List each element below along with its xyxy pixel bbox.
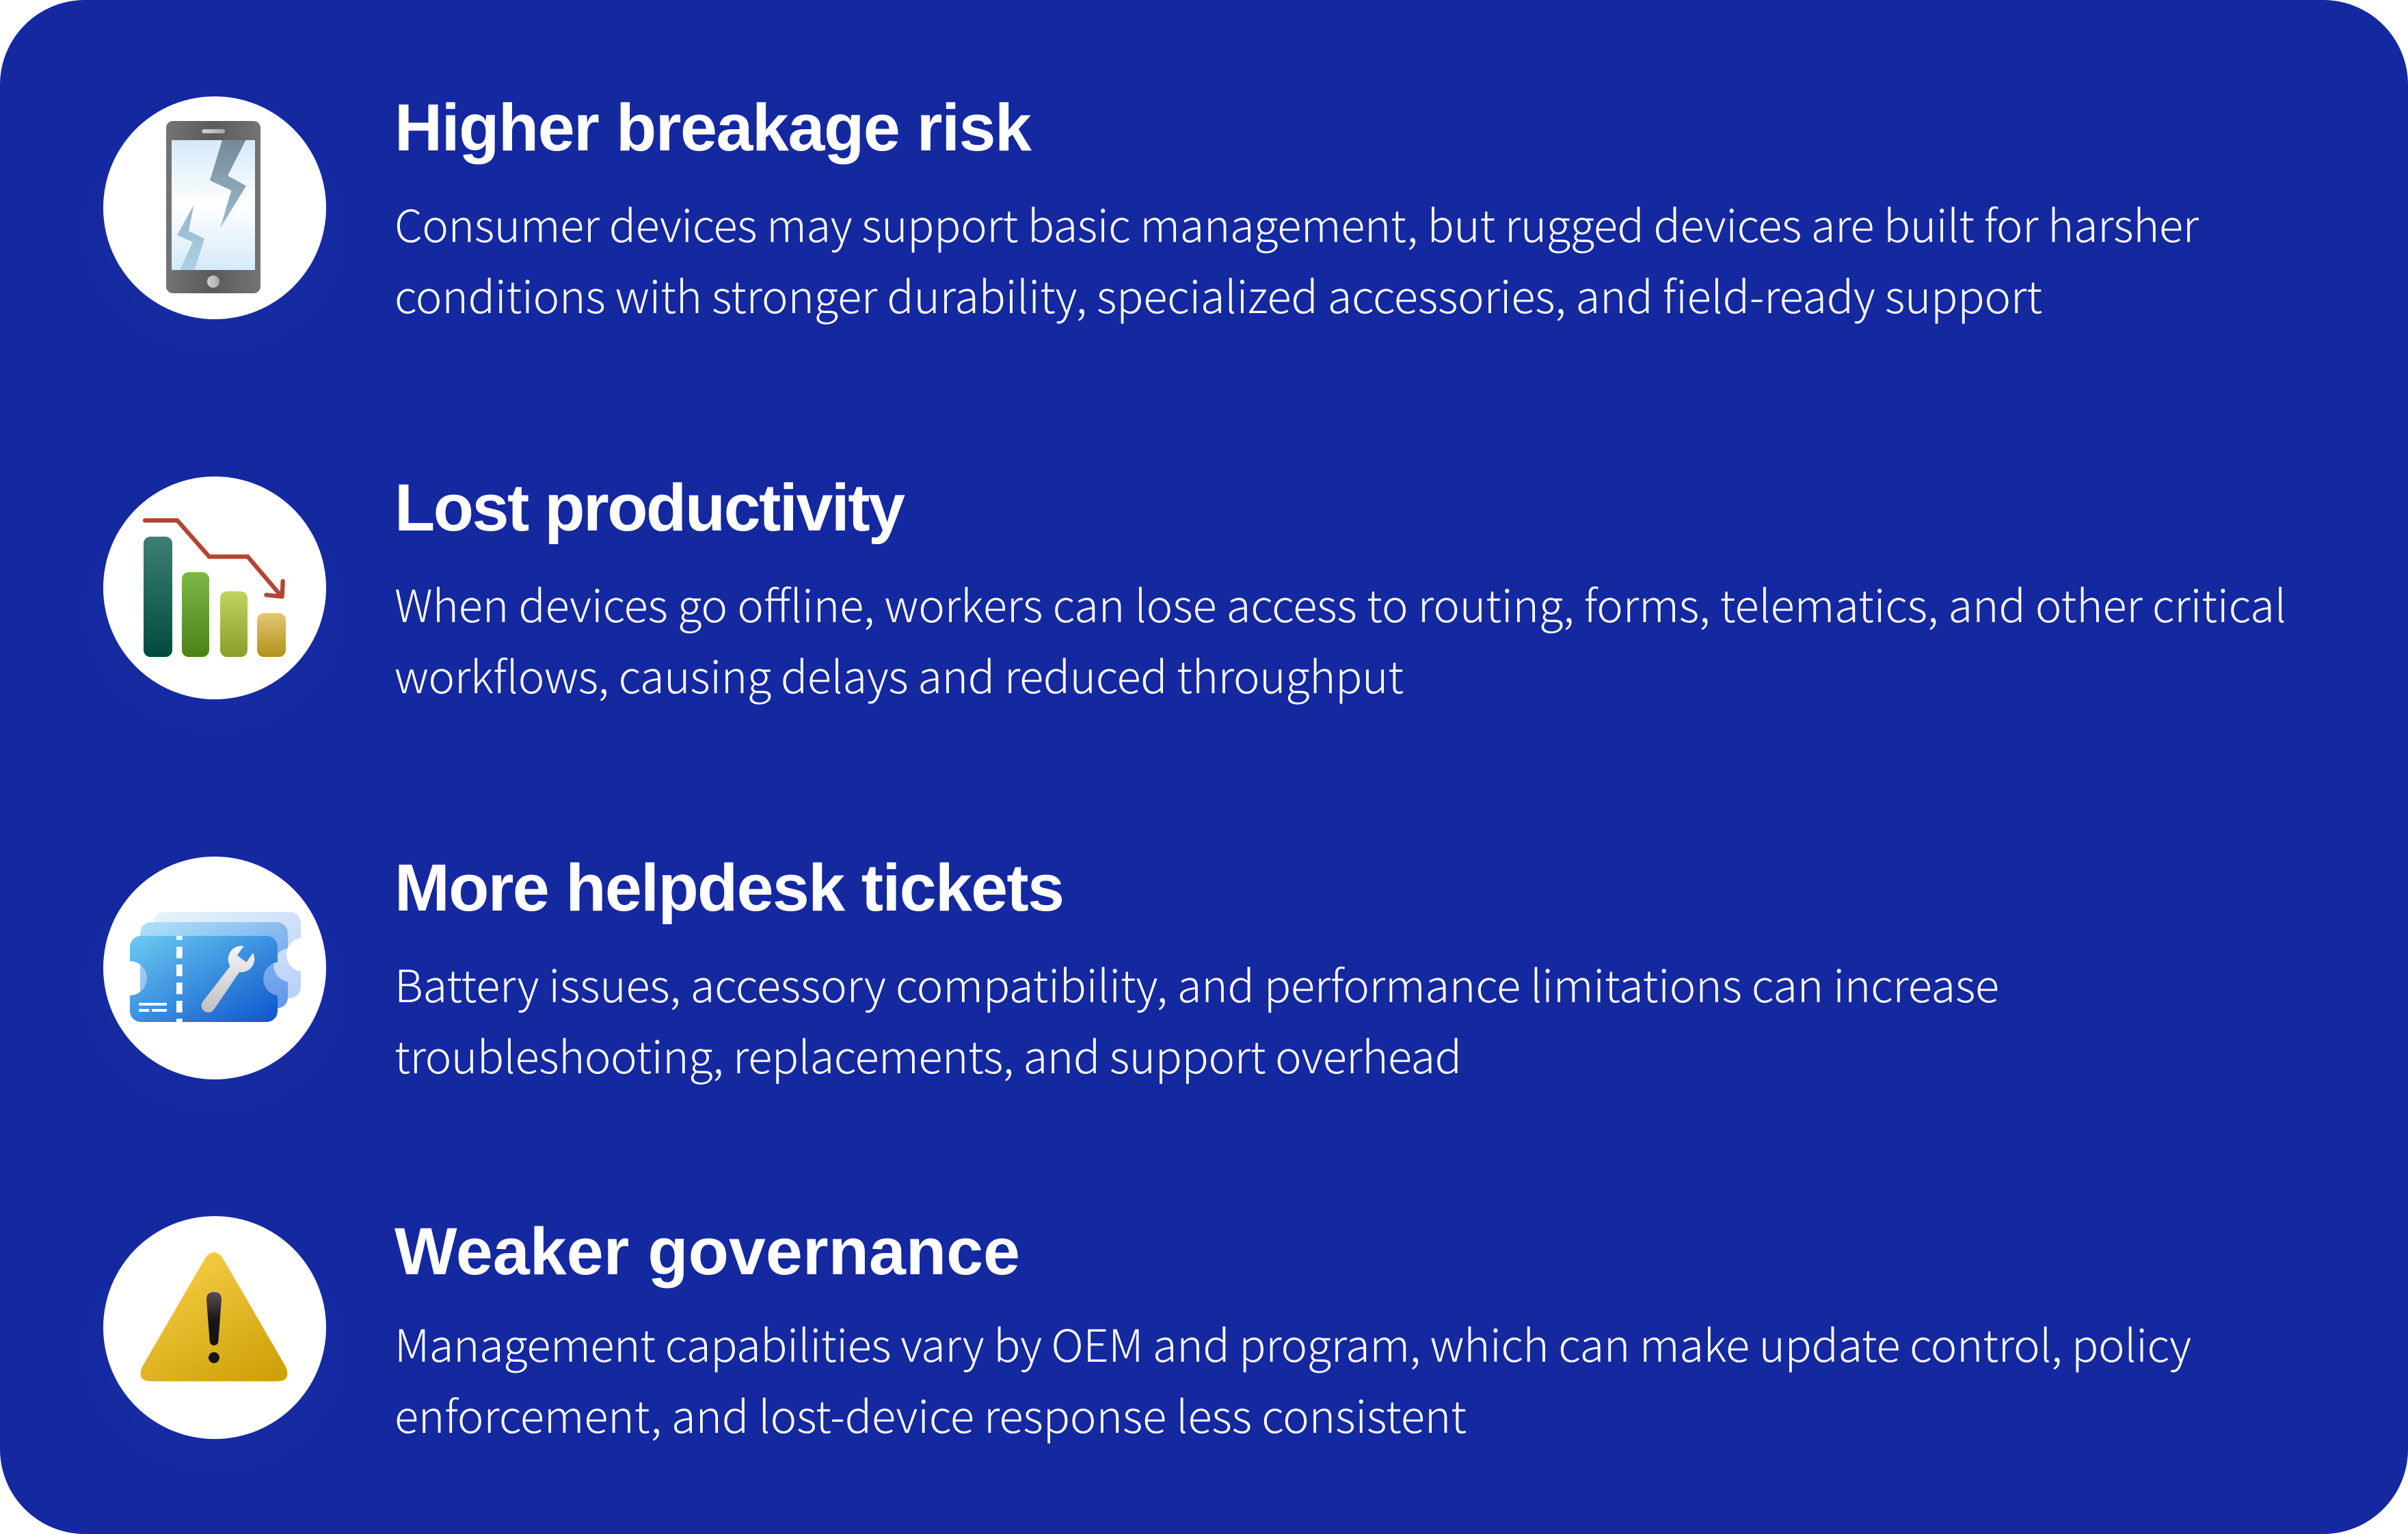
icon glow bbox=[51, 842, 379, 1143]
icon: falling bar chart bbox=[144, 520, 286, 657]
body text bbox=[394, 951, 1999, 1086]
heading: Lost productivity bbox=[394, 470, 905, 545]
icon circle bbox=[103, 96, 326, 319]
row: weaker governance bbox=[51, 1202, 2191, 1503]
body text: Consumer devices may support basic management, but rugged devices are built for harsher bbox=[394, 191, 2199, 255]
body text: enforcement, and lost-device response less consistent bbox=[394, 1382, 1467, 1446]
row: lost productivity bbox=[51, 462, 2286, 763]
icon: support tickets with wrench bbox=[130, 912, 301, 1022]
body text bbox=[394, 571, 2286, 706]
row: higher breakage risk bbox=[51, 82, 2199, 383]
body text: Management capabilities vary by OEM and program, which can make update control, policy bbox=[394, 1310, 2191, 1375]
body text: conditions with stronger durability, specialized accessories, and field-ready support bbox=[394, 262, 2042, 326]
body text: workflows, causing delays and reduced throughput bbox=[394, 642, 1404, 706]
body text bbox=[394, 1310, 2191, 1446]
body text: Battery issues, accessory compatibility, and performance limitations can increase bbox=[394, 951, 1999, 1015]
icon glow bbox=[51, 462, 379, 763]
icon glow bbox=[51, 1202, 379, 1503]
row: more helpdesk tickets bbox=[51, 842, 1999, 1143]
icon circle bbox=[103, 476, 326, 699]
body text: troubleshooting, replacements, and support overhead bbox=[394, 1022, 1462, 1086]
heading: Higher breakage risk bbox=[394, 90, 1032, 165]
body text: When devices go offline, workers can lose access to routing, forms, telematics, and other critical bbox=[394, 571, 2286, 635]
icon circle bbox=[103, 1216, 326, 1439]
body text bbox=[394, 191, 2199, 326]
icon glow bbox=[51, 82, 379, 383]
heading: Weaker governance bbox=[394, 1214, 1020, 1289]
icon: warning triangle bbox=[141, 1252, 287, 1382]
icon circle bbox=[103, 857, 326, 1079]
icon: cracked phone bbox=[166, 121, 260, 293]
heading: More helpdesk tickets bbox=[394, 850, 1065, 925]
